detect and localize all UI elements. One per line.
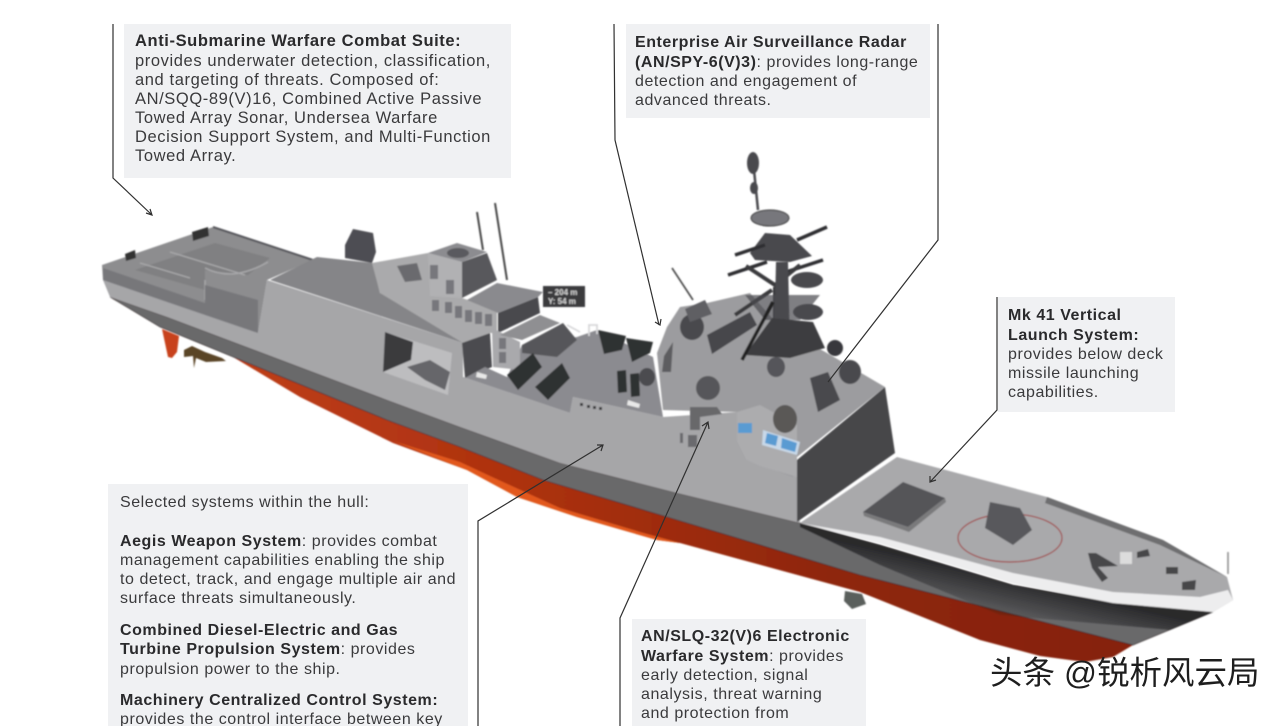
leader line: radar to hull bbox=[614, 24, 661, 325]
antennas bbox=[477, 203, 507, 280]
callout: hull systems: Aegis Weapon System: provides combat bbox=[120, 533, 437, 550]
callout: air surveillance radar: Enterprise Air Surveillance Radar bbox=[635, 34, 907, 51]
callout: air surveillance radar: advanced threats. bbox=[635, 92, 772, 109]
callout: air surveillance radar: (AN/SPY-6(V)3): provides long-range bbox=[635, 54, 918, 71]
watermark: 头条 @锐析风云局 bbox=[990, 655, 1260, 691]
forward dark block bbox=[797, 387, 895, 522]
main hull side bbox=[103, 267, 800, 523]
callout: electronic warfare: and protection from bbox=[641, 705, 789, 722]
callout: Mk 41: Mk 41 Vertical bbox=[1008, 307, 1122, 324]
callout: air surveillance radar: detection and engagement of bbox=[635, 73, 857, 90]
callout: anti-submarine warfare: Towed Array Sonar, Undersea Warfare bbox=[135, 109, 438, 127]
leader line: anti-submarine bbox=[113, 24, 152, 215]
leader line: hull systems bbox=[478, 445, 603, 726]
red lower hull bbox=[160, 327, 1133, 662]
leader line: Mk 41 bbox=[930, 297, 997, 482]
callout: anti-submarine warfare: Towed Array. bbox=[135, 147, 236, 165]
callout: electronic warfare: AN/SLQ-32(V)6 Electronic bbox=[641, 628, 850, 645]
callout: hull systems: to detect, track, and engage multiple air and bbox=[120, 571, 456, 588]
mast bbox=[672, 152, 827, 360]
callout: electronic warfare: analysis, threat warning bbox=[641, 686, 822, 703]
callout: electronic warfare: Warfare System: provides bbox=[641, 648, 844, 665]
leader line: electronic warfare bbox=[620, 422, 709, 726]
callout: hull systems: Machinery Centralized Control System: bbox=[120, 692, 438, 709]
flight deck bbox=[102, 227, 313, 333]
callout: anti-submarine warfare: AN/SQQ-89(V)16, Combined Active Passive bbox=[135, 90, 482, 108]
gun circle and turret bbox=[958, 502, 1062, 562]
callout: hull systems: Combined Diesel-Electric and Gas bbox=[120, 622, 398, 639]
orange keel lip bbox=[393, 441, 680, 543]
launcher racks bbox=[507, 330, 653, 400]
forward superstructure bbox=[639, 293, 885, 477]
dark boot-topping band bbox=[110, 297, 1213, 645]
callout: anti-submarine warfare: Anti-Submarine Warfare Combat Suite: bbox=[135, 32, 461, 50]
callout: Mk 41: capabilities. bbox=[1008, 384, 1099, 401]
mid superstructure decks bbox=[270, 229, 663, 417]
rudder and propeller bbox=[162, 329, 226, 368]
callout: Mk 41: provides below deck bbox=[1008, 346, 1164, 363]
hangar recess bbox=[383, 332, 452, 395]
callout: Mk 41: Launch System: bbox=[1008, 327, 1139, 344]
callout: Mk 41: missile launching bbox=[1008, 365, 1139, 382]
callout: hull systems bbox=[108, 484, 468, 726]
VLS plate bbox=[863, 482, 946, 532]
dimension sign: Y: 54 m bbox=[548, 297, 576, 306]
bow deck bbox=[800, 457, 1233, 612]
callout: hull systems: propulsion power to the ship. bbox=[120, 661, 341, 678]
anchor gear bbox=[1088, 549, 1228, 590]
callout: Mk 41 bbox=[998, 297, 1175, 412]
callout: anti-submarine warfare: provides underwater detection, classification, bbox=[135, 52, 491, 70]
ship illustration bbox=[102, 152, 1233, 662]
dimension sign: – 204 m bbox=[548, 288, 577, 297]
callout: anti-submarine warfare: Decision Support System, and Multi-Function bbox=[135, 128, 491, 146]
sonar appendage bbox=[844, 591, 866, 609]
leader line: radar to array bbox=[828, 24, 938, 382]
callout: anti-submarine warfare: and targeting of threats. Composed of: bbox=[135, 71, 439, 89]
callout: air surveillance radar bbox=[626, 24, 930, 118]
callout: hull systems: Turbine Propulsion System: provides bbox=[120, 641, 415, 658]
callout: hull systems: management capabilities enabling the ship bbox=[120, 552, 445, 569]
callout: anti-submarine warfare bbox=[124, 24, 511, 178]
callout: electronic warfare: early detection, signal bbox=[641, 667, 808, 684]
callout: hull systems: Selected systems within the hull: bbox=[120, 494, 369, 511]
callout: hull systems: surface threats simultaneously. bbox=[120, 590, 356, 607]
callout: electronic warfare bbox=[632, 619, 866, 726]
dimension sign bbox=[543, 286, 585, 307]
